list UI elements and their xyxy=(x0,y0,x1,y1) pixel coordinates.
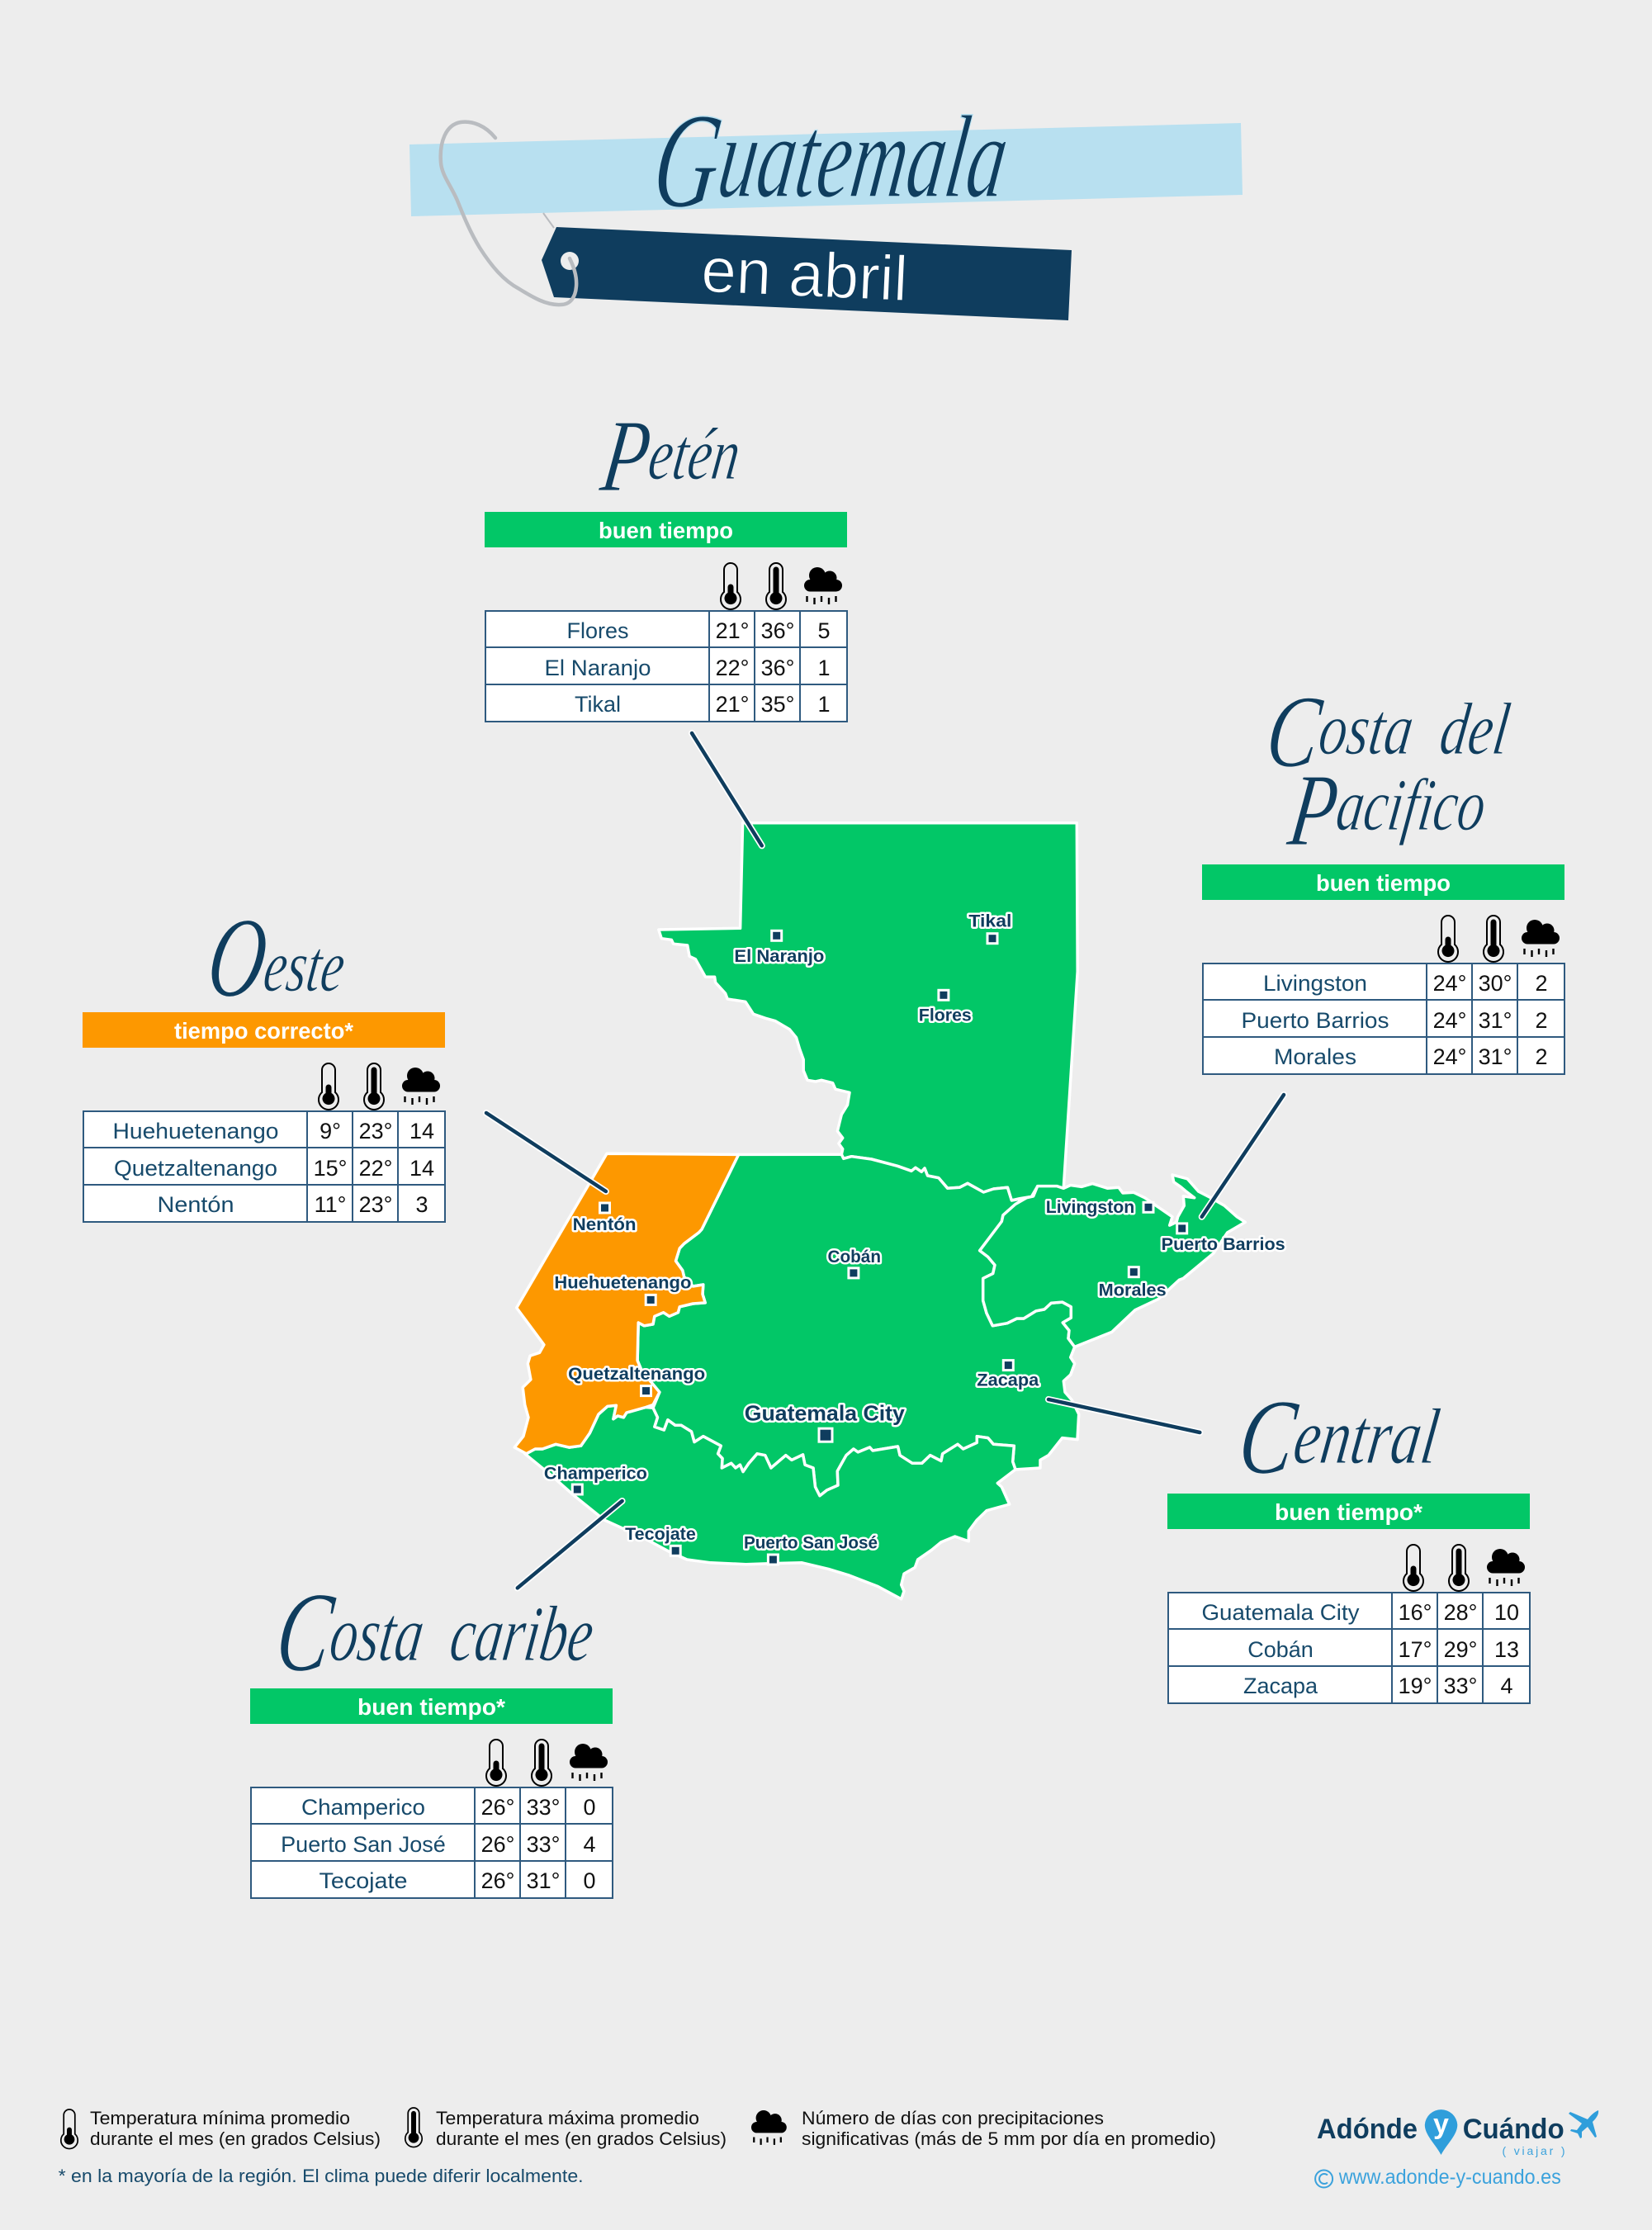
logo wordmark: Cuándo: Cuándo xyxy=(1463,2114,1564,2145)
table: Costa caribe: 33° xyxy=(527,1832,560,1857)
table: Costa caribe: Tecojate xyxy=(319,1868,408,1893)
heading: Costa del: C xyxy=(1260,675,1328,789)
city labels: El Naranjo xyxy=(734,946,824,966)
heading: Oeste: este xyxy=(259,924,350,1007)
table: Central: Zacapa xyxy=(1243,1674,1318,1698)
region: Central xyxy=(637,1154,1079,1496)
city labels: Cobán xyxy=(827,1247,881,1267)
table: Oeste: 14 xyxy=(409,1119,434,1143)
tag hole xyxy=(561,252,579,270)
panel: Oeste xyxy=(83,894,445,1222)
table: Oeste: 3 xyxy=(415,1192,428,1217)
table: Petén: 21° xyxy=(716,692,749,717)
logo tagline: ( viajar ) xyxy=(1503,2144,1565,2157)
table: Oeste: tiempo correcto* xyxy=(174,1018,353,1044)
heading: Central: C xyxy=(1232,1379,1304,1497)
table: Costa del Pacifico: 2 xyxy=(1535,1008,1548,1033)
table: Oeste: 22° xyxy=(359,1156,392,1181)
heading: Pacifico: acifico xyxy=(1332,763,1491,846)
table: Costa caribe: Champerico xyxy=(301,1795,425,1820)
city labels xyxy=(544,911,1285,1553)
website: www.adonde-y-cuando.es xyxy=(1338,2166,1561,2189)
table: Petén: 36° xyxy=(761,618,794,643)
region: north-east coast xyxy=(980,1175,1245,1347)
table: Oeste: Quetzaltenango xyxy=(114,1156,277,1181)
legend text: maximum temperature: durante el mes (en grados Celsius) xyxy=(436,2128,727,2149)
city labels: Quetzaltenango xyxy=(568,1364,705,1384)
table: Petén: 21° xyxy=(716,618,749,643)
legend text: minimum temperature: Temperatura mínima promedio xyxy=(90,2108,350,2128)
table: Central: 17° xyxy=(1399,1637,1432,1662)
table: Oeste: 23° xyxy=(359,1192,392,1217)
table: Costa del Pacifico: 31° xyxy=(1479,1008,1512,1033)
table: Oeste: Huehuetenango xyxy=(112,1119,278,1143)
table: Petén: 1 xyxy=(817,656,831,680)
table: Petén: 1 xyxy=(817,692,831,717)
table: Oeste: 11° xyxy=(315,1192,346,1217)
table: Oeste: Nentón xyxy=(157,1192,234,1217)
table: Costa del Pacifico: Morales xyxy=(1274,1044,1356,1069)
table: Oeste: 15° xyxy=(314,1156,347,1181)
city labels: Flores xyxy=(919,1006,972,1025)
ring xyxy=(441,122,576,305)
city labels: Tikal xyxy=(968,911,1011,931)
logo wordmark: Adónde: Adónde xyxy=(1317,2114,1418,2145)
navy tag xyxy=(542,227,1072,320)
table: Central: Cobán xyxy=(1247,1637,1314,1662)
table: Costa caribe: Puerto San José xyxy=(281,1832,446,1857)
map of Guatemala xyxy=(514,823,1285,1599)
table: Costa caribe: 0 xyxy=(583,1868,596,1893)
table: Central: 10 xyxy=(1494,1600,1519,1625)
table: Central: buen tiempo* xyxy=(1275,1499,1422,1525)
table: Central: 33° xyxy=(1444,1674,1477,1698)
table: Petén: El Naranjo xyxy=(545,656,651,680)
table: Central: 19° xyxy=(1399,1674,1432,1698)
table: Costa del Pacifico: 31° xyxy=(1479,1044,1512,1069)
panel: Petén xyxy=(485,400,847,722)
table: Petén: buen tiempo xyxy=(599,518,733,543)
table: Petén xyxy=(485,512,847,722)
title text: G xyxy=(645,85,731,236)
table: Central xyxy=(1167,1494,1530,1703)
legend text: rainy days: Número de días con precipitaciones xyxy=(802,2108,1104,2128)
heading: Pacifico: P xyxy=(1282,754,1345,868)
table: Petén: 36° xyxy=(761,656,794,680)
table: Petén: 22° xyxy=(716,656,749,680)
table: Costa caribe: 26° xyxy=(481,1868,514,1893)
region: south coast xyxy=(525,1405,1015,1599)
table: Costa del Pacifico: 2 xyxy=(1535,971,1548,996)
table: Petén: 35° xyxy=(761,692,794,717)
city labels: Tecojate xyxy=(625,1524,696,1544)
table: Costa del Pacifico: Livingston xyxy=(1263,971,1367,996)
logo letter y: y xyxy=(1433,2109,1449,2140)
region: Oeste xyxy=(514,1153,739,1454)
table: Central: 16° xyxy=(1399,1600,1432,1625)
table: Oeste: 9° xyxy=(320,1119,341,1143)
table: Central: 28° xyxy=(1444,1600,1477,1625)
table: Costa del Pacifico: buen tiempo xyxy=(1316,870,1451,896)
table: Costa del Pacifico: Puerto Barrios xyxy=(1242,1008,1389,1033)
table: Oeste xyxy=(83,1012,445,1222)
table: Costa caribe: 26° xyxy=(481,1832,514,1857)
table: Costa caribe: 0 xyxy=(583,1795,596,1820)
region: Petén xyxy=(659,823,1077,1200)
table: Costa del Pacifico: 2 xyxy=(1535,1044,1548,1069)
icon: minimum temperature xyxy=(61,2109,78,2149)
subtitle text: en abril xyxy=(700,234,909,315)
legend text: rainy days: significativas (más de 5 mm por día en promedio) xyxy=(802,2128,1216,2149)
city labels: Puerto San José xyxy=(744,1533,878,1553)
table: Petén: 5 xyxy=(817,618,831,643)
heading: Costa caribe: C xyxy=(269,1569,341,1695)
city labels: Livingston xyxy=(1046,1197,1134,1217)
city labels: Morales xyxy=(1099,1280,1167,1300)
copyright icon xyxy=(1315,2170,1332,2188)
heading: Central: entral xyxy=(1289,1392,1445,1480)
table: Central: 4 xyxy=(1500,1674,1513,1698)
light blue title banner xyxy=(409,123,1243,216)
table: Costa del Pacifico: 24° xyxy=(1433,1044,1466,1069)
city labels: Nentón xyxy=(573,1214,637,1234)
footnote: * en la mayoría de la región. El clima puede diferir localmente. xyxy=(59,2166,584,2186)
table: Central: Guatemala City xyxy=(1202,1600,1360,1625)
panel: Costa caribe xyxy=(250,1569,613,1898)
table: Oeste: 23° xyxy=(359,1119,392,1143)
panel: Costa del Pacifico xyxy=(1202,675,1564,1074)
table: Costa del Pacifico: 30° xyxy=(1479,971,1512,996)
legend text: maximum temperature: Temperatura máxima promedio xyxy=(436,2108,699,2128)
title text: uatemala xyxy=(711,92,1016,223)
table: Costa del Pacifico: 24° xyxy=(1433,971,1466,996)
title block xyxy=(409,85,1243,320)
table: Costa caribe: 31° xyxy=(527,1868,560,1893)
legend xyxy=(59,2108,1216,2186)
table: Petén: Flores xyxy=(566,618,629,643)
icon: plane xyxy=(1569,2110,1598,2138)
heading: Petén: etén xyxy=(644,412,746,495)
table: Costa del Pacifico: 24° xyxy=(1433,1008,1466,1033)
leader lines xyxy=(486,733,1284,1588)
table: Oeste: 14 xyxy=(409,1156,434,1181)
heading: Costa caribe: osta caribe xyxy=(325,1589,599,1678)
heading: Costa del: osta del xyxy=(1314,687,1515,770)
logo pin xyxy=(1425,2109,1457,2155)
city labels: Huehuetenango xyxy=(554,1273,691,1293)
city labels: Champerico xyxy=(544,1463,647,1483)
logo xyxy=(1315,2109,1598,2189)
table: Petén: Tikal xyxy=(575,692,621,717)
icon: maximum temperature xyxy=(405,2108,422,2147)
table: Central: 29° xyxy=(1444,1637,1477,1662)
table: Costa caribe: 33° xyxy=(527,1795,560,1820)
heading: Oeste: O xyxy=(201,894,275,1020)
legend text: minimum temperature: durante el mes (en grados Celsius) xyxy=(90,2128,381,2149)
icon: rainy days xyxy=(751,2110,787,2145)
ring tail xyxy=(543,213,554,228)
table: Costa caribe: 4 xyxy=(583,1832,596,1857)
table: Costa del Pacifico xyxy=(1202,864,1564,1074)
panel: Central xyxy=(1167,1379,1530,1703)
table: Costa caribe: 26° xyxy=(481,1795,514,1820)
city labels: Puerto Barrios xyxy=(1162,1234,1285,1254)
table: Costa caribe: buen tiempo* xyxy=(357,1694,505,1720)
city labels: Zacapa xyxy=(977,1371,1039,1390)
city labels: Guatemala City xyxy=(745,1401,905,1426)
city markers xyxy=(572,930,1187,1565)
table: Central: 13 xyxy=(1494,1637,1519,1662)
heading: Petén: P xyxy=(594,400,657,514)
table: Costa caribe xyxy=(250,1688,613,1898)
